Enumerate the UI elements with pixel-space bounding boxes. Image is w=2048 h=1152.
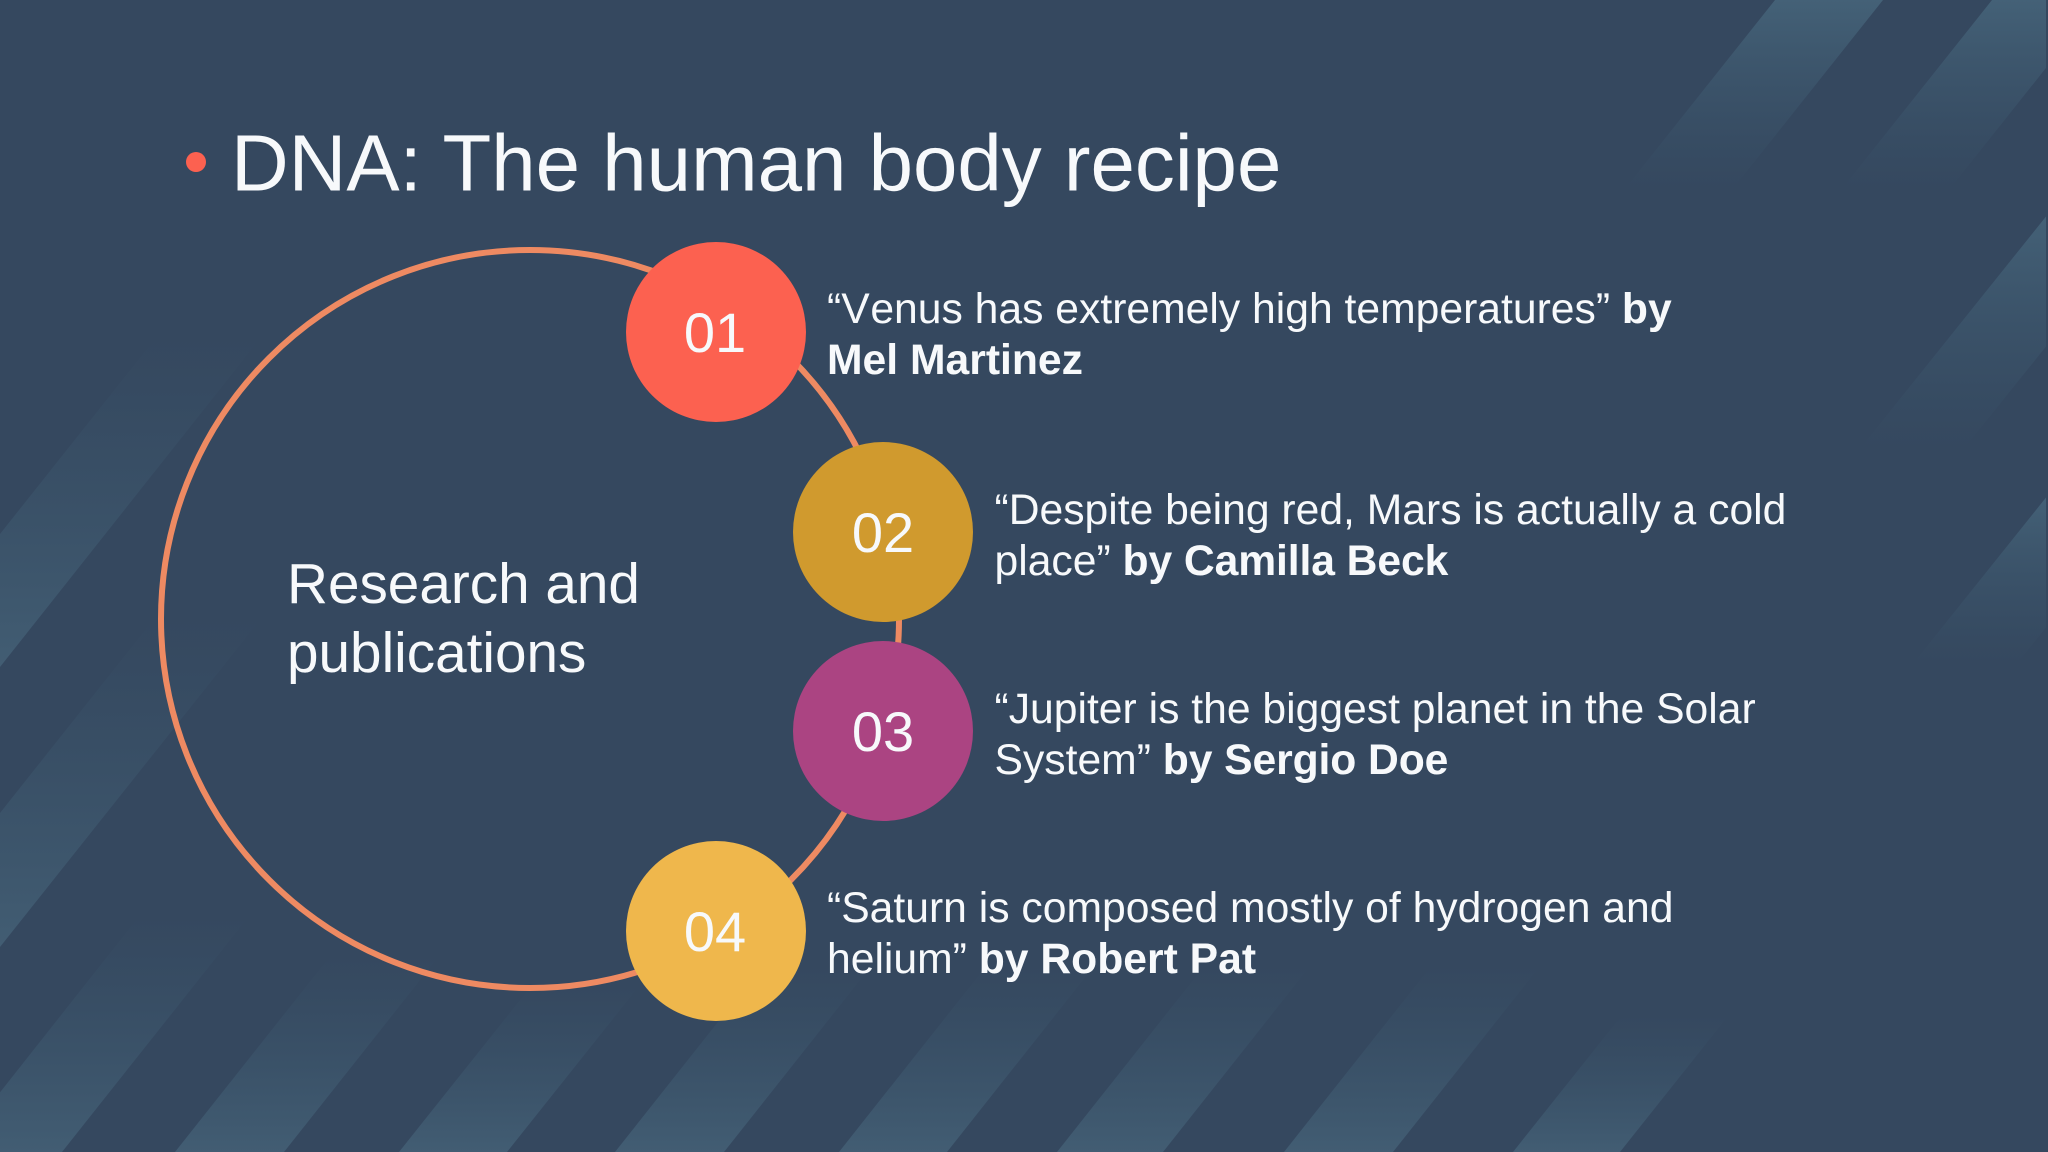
item 01	[626, 242, 1672, 422]
quote 03: “Jupiter is the biggest planet in the Solar	[994, 685, 1756, 733]
quote 02: by Camilla Beck	[1123, 537, 1449, 585]
item 02	[793, 442, 1786, 622]
number 02: 02	[852, 501, 914, 564]
quote 01: Mel Martinez	[827, 336, 1083, 384]
quote 04: by Robert Pat	[979, 935, 1256, 983]
circle 03	[793, 641, 973, 821]
central label: publications	[287, 622, 586, 685]
circle 04	[626, 841, 806, 1021]
quote 01: “V	[827, 285, 870, 333]
title bullet	[186, 152, 206, 172]
title: DNA: The human body recipe	[231, 118, 1281, 208]
quote 03: System”	[994, 736, 1163, 784]
central label: Research and	[287, 553, 640, 616]
quote 02: place”	[994, 537, 1123, 585]
circle 01	[626, 242, 806, 422]
quote 04: “Saturn is composed mostly of hydrogen and	[827, 884, 1673, 932]
quote 01: enus has extremely high temperatures” by	[870, 285, 1672, 333]
number 04: 04	[684, 900, 746, 963]
number 01: 01	[684, 301, 746, 364]
number 03: 03	[852, 700, 914, 763]
item 03	[793, 641, 1756, 821]
quote 03: by Sergio Doe	[1163, 736, 1448, 784]
item 04	[626, 841, 1673, 1021]
ring	[161, 250, 899, 988]
quote 02: “Despite being red, Mars is actually a cold	[994, 486, 1786, 534]
quote 04: helium”	[827, 935, 979, 983]
circle 02	[793, 442, 973, 622]
